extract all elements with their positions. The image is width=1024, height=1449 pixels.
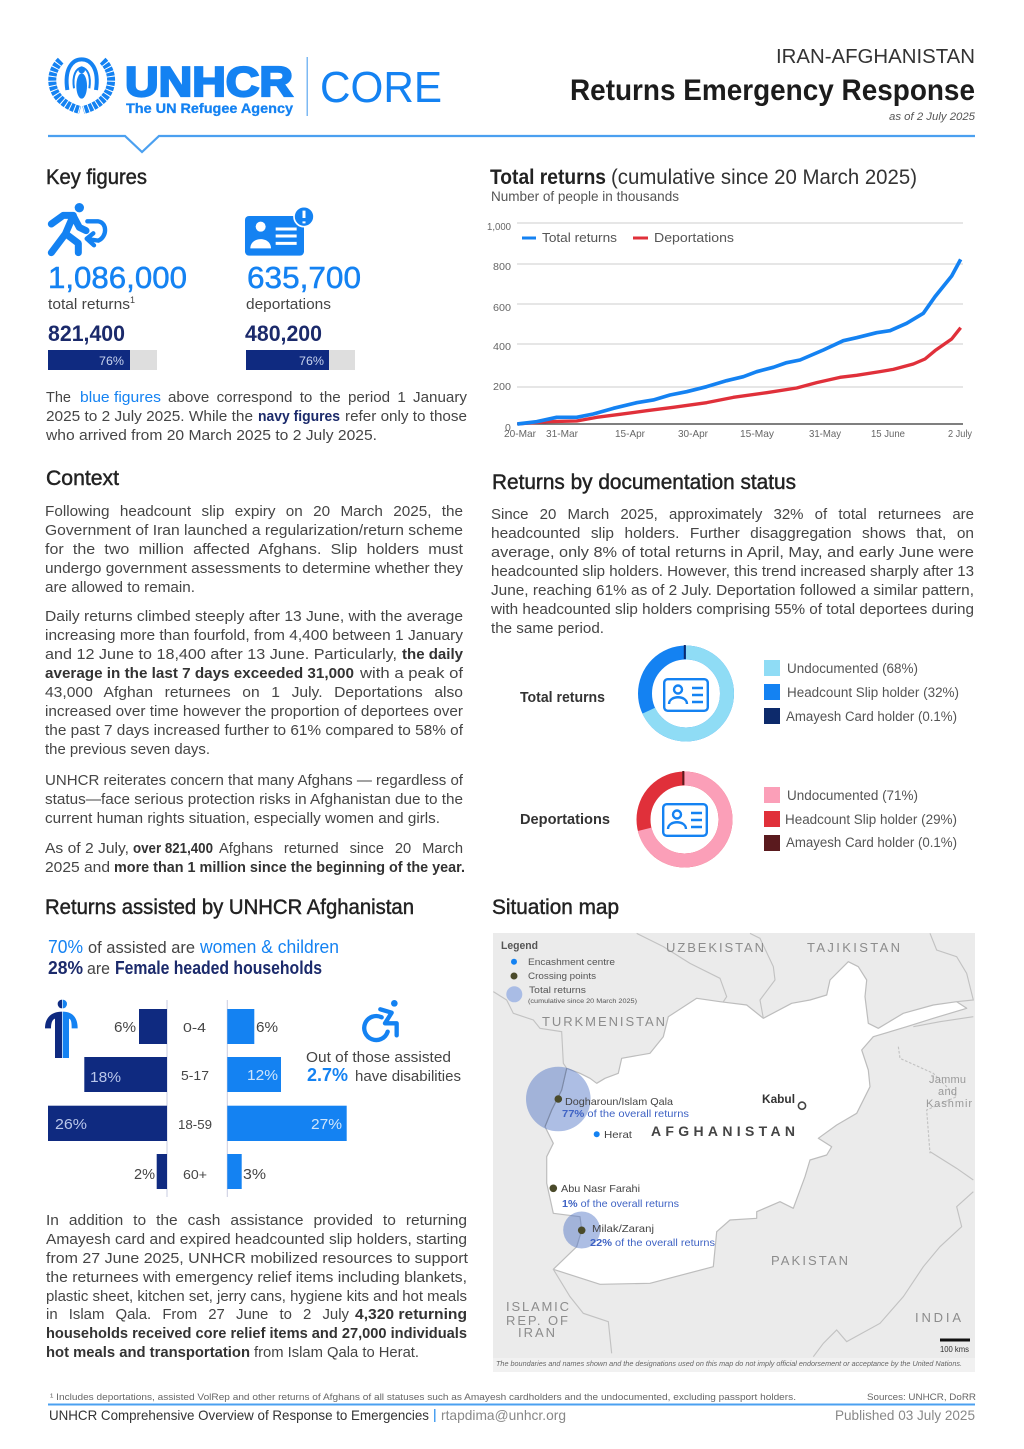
text: protection concern paragraph (45, 772, 464, 827)
text: daily returns paragraph: increasing more than fourfold, from 4,400 between 1 January (45, 627, 464, 644)
map: legend: Legend (501, 940, 538, 952)
chart gridlines and axis: 600 (493, 302, 511, 314)
text: disabilities callout: have disabilities (355, 1069, 461, 1085)
bar chart: female side: 26% (55, 1116, 87, 1133)
text: documentation paragraph: with headcounted slip holders comprising 55% of total deportees during (490, 601, 974, 618)
text: daily returns paragraph: increased over time however the proportion of deportees over (45, 703, 463, 720)
map: country labels: Jammu (929, 1074, 966, 1086)
map: country labels: INDIA (915, 1310, 961, 1325)
header: report title: IRAN-AFGHANISTAN (776, 46, 975, 68)
legend: deportations: Undocumented (71%) (787, 788, 918, 803)
panel: situation map (492, 896, 975, 1372)
text: figures explanation: blue figures (80, 389, 161, 406)
text: scheme paragraph: undergo government assessments to determine whether they (45, 560, 464, 577)
text: documentation paragraph: average, only 8% of total returns in April, May, and early June were (491, 544, 974, 561)
header: UNHCR CORE logo: CORE (320, 63, 442, 112)
map: crossing point Dogharoun (554, 1095, 689, 1120)
map: legend: Total returns (529, 985, 587, 995)
icon: person half navy half blue (45, 1000, 78, 1058)
panel: key figures (45, 166, 468, 444)
chart gridlines and axis: 15 June (871, 428, 905, 440)
figure: deportations: deportations (246, 296, 331, 313)
bar chart: male side (227, 1009, 347, 1189)
footnote: ¹ Includes deportations, assisted VolRep and other returns of Afghans of all statuses such as Amayesh cardholders and the undocumented, excluding passport holders. (50, 1392, 796, 1403)
header: report title (570, 46, 976, 123)
text: figures explanation: who arrived from 20 March 2025 to 2 July 2025. (45, 427, 377, 444)
text: totals paragraph (45, 840, 465, 876)
chart gridlines and axis: 15-May (740, 428, 775, 440)
heading: documentation status: Returns by documentation status (492, 471, 796, 494)
sources: Sources: UNHCR, DoRR (867, 1392, 976, 1403)
heading: total returns: Number of people in thousands (491, 188, 679, 204)
map: country labels: ISLAMIC (506, 1299, 569, 1314)
text: figures explanation: 2025 to 2 July 2025. While the (46, 408, 253, 425)
chart gridlines and axis: 2 July (948, 428, 973, 440)
progress bar: returns 76% (48, 350, 157, 370)
bar chart: male side: 12% (247, 1067, 278, 1084)
map: country labels: TAJIKISTAN (807, 940, 900, 955)
icon: person returning (51, 203, 105, 253)
text: daily returns paragraph: Daily returns climbed steeply after 13 June, with the average (45, 608, 463, 625)
text: scheme paragraph: are allowed to remain. (45, 579, 195, 596)
text: totals paragraph: 2025 and (45, 859, 110, 876)
header: UNHCR CORE logo: UNHCR (125, 58, 293, 105)
text: documentation paragraph: headcounted slip holders. However, this trend increased sharply after 13 (491, 563, 974, 580)
footer (48, 1392, 976, 1423)
chart legend: Deportations (654, 230, 735, 245)
bar chart: age labels (178, 1020, 212, 1182)
text: protection concern paragraph: status—face serious protection risks in Afghanistan due to the (45, 791, 463, 808)
heading: key figures: Key figures (46, 166, 147, 189)
text: documentation paragraph: the same period. (491, 620, 604, 637)
donut: total returns by status (645, 645, 727, 734)
map: legend: Encashment centre (528, 957, 615, 967)
panel: context (45, 467, 465, 876)
text: assistance paragraph: Amayesh card and expired headcounted slip holders, starting (46, 1231, 467, 1248)
publication date: Published 03 July 2025 (835, 1407, 975, 1423)
text: scheme paragraph: Government of Iran launched a regularization/return scheme (45, 522, 463, 539)
map: crossing point Milak (578, 1223, 715, 1249)
progress bar: deportations 76%: 76% (299, 354, 324, 368)
text: assistance paragraph: hot meals and transportation (46, 1344, 250, 1361)
text: figures explanation: refer only to those (345, 408, 467, 425)
header: report title: as of 2 July 2025 (889, 111, 976, 123)
text: assisted highlights: Female headed households (115, 958, 322, 978)
footer separator (434, 1409, 436, 1422)
text: documentation paragraph: June, reaching 61% as of 2 July. Deportation followed a similar pattern, (491, 582, 974, 599)
text: assistance paragraph: households received core relief items and 27,000 individuals (46, 1325, 467, 1342)
map: country labels: and (938, 1086, 957, 1098)
chart gridlines and axis: 200 (493, 381, 511, 393)
label: deportations donut: Deportations (520, 811, 610, 828)
map: Herat (594, 1129, 632, 1141)
text: disabilities callout: 2.7% (307, 1065, 348, 1085)
chart gridlines and axis: 31-Mar (546, 428, 578, 440)
line: deportations (517, 328, 961, 424)
bar chart: female side: 6% (114, 1019, 136, 1036)
map: country labels: AFGHANISTAN (651, 1123, 795, 1139)
map: country labels: UZBEKISTAN (666, 940, 764, 955)
map: crossing point Abu Nasr Farahi (550, 1183, 679, 1210)
map: legend (501, 940, 637, 1005)
chart gridlines and axis: 20-Mar (504, 428, 536, 440)
text: daily returns paragraph: the past 7 days increased further to 61% compared to 58% of (45, 722, 464, 739)
map: crossing point Milak: 22% of the overall returns (590, 1237, 715, 1249)
chart legend (522, 230, 735, 245)
map: Afghanistan shape (545, 962, 967, 1284)
text: daily returns paragraph (45, 608, 464, 758)
bar chart: male side: 27% (311, 1116, 342, 1133)
heading: total returns (490, 166, 917, 204)
figure: deportations: 635,700 (247, 260, 361, 295)
text: figures explanation (45, 389, 468, 444)
progress bar: returns 76%: 76% (99, 354, 124, 368)
map: legend: (cumulative since 20 March 2025) (528, 999, 637, 1005)
footer credit: UNHCR Comprehensive Overview of Response to Emergencies (49, 1407, 429, 1423)
text: scheme paragraph: Following headcount slip expiry on 20 March 2025, the (45, 503, 463, 520)
text: assisted highlights: women & children (199, 937, 339, 957)
map: country labels (506, 940, 972, 1340)
map: neighbouring borders (493, 933, 973, 1357)
text: totals paragraph: Afghans returned since 20 March (219, 840, 463, 857)
text: scheme paragraph (45, 503, 464, 596)
text: disabilities callout: Out of those assisted (306, 1050, 451, 1066)
bar chart: female side: 2% (134, 1166, 155, 1183)
text: assistance paragraph: from Islam Qala to Herat. (254, 1344, 419, 1361)
text: figures explanation: navy figures (258, 408, 340, 425)
text: totals paragraph: over 821,400 (133, 840, 213, 857)
map: crossing point Milak: Milak/Zaranj (592, 1223, 654, 1235)
bar chart: age labels: 18-59 (178, 1117, 212, 1132)
line: total returns (517, 259, 961, 424)
text: daily returns paragraph: 43,000 Afghan returnees on 1 July. Deportations also (45, 684, 463, 701)
text: assisted highlights: 28% (48, 958, 83, 978)
heading: situation map: Situation map (492, 896, 619, 919)
chart legend: Total returns (542, 230, 618, 245)
bar chart: male side: 3% (243, 1166, 266, 1183)
text: daily returns paragraph: average in the last 7 days exceeded 31,000 (45, 665, 354, 682)
chart gridlines and axis: 15-Apr (615, 428, 645, 440)
text: totals paragraph: As of 2 July, (45, 840, 129, 857)
chart gridlines and axis: 31-May (809, 428, 842, 440)
chart axes (167, 1000, 227, 1197)
bar chart: female side (48, 1009, 167, 1189)
figure: total returns: 1,086,000 (48, 260, 187, 295)
map: scale bar (940, 1338, 970, 1354)
legend: total returns (764, 660, 959, 724)
bar chart: male side: 6% (256, 1019, 278, 1036)
icon: ID card with alert (245, 207, 314, 256)
header: UNHCR CORE logo (52, 57, 442, 116)
figure: total returns: 1 (130, 295, 135, 305)
legend: total returns: Undocumented (68%) (787, 661, 918, 676)
figure: total returns: 821,400 (48, 321, 125, 346)
panel: returns assisted by UNHCR Afghanistan (45, 896, 469, 1361)
text: daily returns paragraph: the daily (402, 646, 464, 663)
header: report title: Returns Emergency Response (570, 74, 975, 107)
text: daily returns paragraph: with a peak of (359, 665, 464, 682)
icon: ID card (664, 679, 708, 711)
map: country labels: REP. OF (506, 1313, 568, 1328)
text: assistance paragraph: from 27 June 2025, UNHCR mobilized resources to support (46, 1250, 469, 1267)
map: legend: Crossing points (528, 971, 597, 981)
map background (493, 933, 975, 1372)
heading: total returns: Total returns (490, 166, 606, 189)
text: documentation paragraph: Since 20 March 2025, approximately 32% of total returnees are (491, 506, 974, 523)
text: assistance paragraph: 4,320 returning (355, 1306, 467, 1323)
bar chart: female side: 18% (90, 1069, 121, 1086)
map: crossing point Dogharoun: 77% of the overall returns (562, 1108, 689, 1120)
progress bar: deportations 76% (246, 350, 355, 370)
text: documentation paragraph: headcounted slip holders. Further disaggregation shows that, on (491, 525, 974, 542)
legend: deportations (764, 787, 957, 851)
donut: deportations by status (644, 771, 726, 860)
map: Herat: Herat (604, 1129, 632, 1141)
map: country labels: PAKISTAN (771, 1253, 848, 1268)
text: assistance paragraph: In addition to the cash assistance provided to returning (46, 1212, 467, 1229)
text: daily returns paragraph: the previous seven days. (45, 741, 210, 758)
text: figures explanation: above correspond to the period 1 January (168, 389, 468, 406)
heading: returns assisted: Returns assisted by UNHCR Afghanistan (45, 896, 414, 919)
text: assisted highlights (48, 937, 339, 978)
text: assistance paragraph (46, 1212, 469, 1361)
bar chart: age labels: 60+ (183, 1167, 207, 1182)
text: figures explanation: The (46, 389, 71, 406)
text: assisted highlights: 70% (48, 937, 83, 957)
icon: UNHCR wreath emblem (52, 59, 111, 110)
legend: deportations: Amayesh Card holder (0.1%) (786, 835, 957, 850)
map: country labels: IRAN (518, 1325, 555, 1340)
figure: deportations (245, 260, 361, 346)
heading: context: Context (46, 467, 119, 490)
text: scheme paragraph: for the two million affected Afghans. Slip holders must (45, 541, 464, 558)
chart gridlines and axis: 30-Apr (678, 428, 708, 440)
map: return volume circles (526, 1067, 600, 1248)
map: crossing point Abu Nasr Farahi: 1% of the overall returns (562, 1198, 679, 1210)
text: daily returns paragraph: and 12 June to 18,400 after 13 June. Particularly, (45, 646, 397, 663)
figure: total returns (48, 260, 187, 346)
figure: deportations: 480,200 (245, 321, 322, 346)
text: protection concern paragraph: current human rights situation, especially women and girls. (45, 810, 440, 827)
icon: wheelchair (364, 1000, 398, 1040)
map: crossing point Abu Nasr Farahi: Abu Nasr Farahi (561, 1183, 640, 1195)
map: country labels: TURKMENISTAN (542, 1014, 665, 1029)
map: disclaimer strip (493, 1358, 975, 1372)
map: disclaimer strip: The boundaries and names shown and the designations used on this map do not imply official endorsement or acceptance by the United Nations. (496, 1361, 962, 1368)
footer rule (48, 1404, 975, 1406)
chart gridlines and axis: 400 (493, 341, 511, 353)
text: assistance paragraph: the returnees with emergency relief items including blankets, (46, 1269, 467, 1286)
text: documentation paragraph (490, 506, 974, 637)
panel: returns by documentation status (490, 471, 974, 860)
figure: total returns: total returns (48, 296, 130, 313)
chart gridlines and axis (487, 221, 973, 440)
text: assistance paragraph: plastic sheet, kitchen set, jerry cans, hygiene kits and hot meals (46, 1288, 467, 1305)
header: UNHCR CORE logo: The UN Refugee Agency (126, 100, 293, 116)
chart gridlines and axis: 1,000 (487, 221, 511, 233)
map: Kabul (762, 1092, 806, 1109)
heading: total returns: (cumulative since 20 March 2025) (611, 166, 917, 189)
footer contact: rtapdima@unhcr.org (441, 1407, 566, 1423)
label: total returns donut: Total returns (520, 689, 605, 706)
text: totals paragraph: more than 1 million since the beginning of the year. (114, 859, 465, 876)
map: scale bar: 100 kms (940, 1345, 969, 1354)
panel: total returns line chart (487, 166, 973, 440)
text: assistance paragraph: in Islam Qala. From 27 June to 2 July (46, 1306, 349, 1323)
map: Kabul: Kabul (762, 1092, 795, 1106)
chart gridlines and axis: 0 (505, 422, 511, 434)
bar chart: age labels: 5-17 (181, 1068, 209, 1083)
header rule with chevron (48, 136, 975, 152)
legend: total returns: Headcount Slip holder (32%) (787, 685, 959, 700)
text: disabilities callout (306, 1050, 461, 1085)
map: crossing point Dogharoun: Dogharoun/Islam Qala (565, 1096, 673, 1108)
legend: total returns: Amayesh Card holder (0.1%) (786, 709, 957, 724)
legend: deportations: Headcount Slip holder (29%) (785, 812, 957, 827)
icon: ID card (663, 804, 707, 836)
bar chart: age labels: 0-4 (183, 1020, 206, 1035)
chart gridlines and axis: 800 (493, 261, 511, 273)
map: country labels: Kashmir (926, 1098, 972, 1110)
text: protection concern paragraph: UNHCR reiterates concern that many Afghans — regardless of (45, 772, 464, 789)
text: assisted highlights: are (87, 959, 110, 978)
text: assisted highlights: of assisted are (88, 938, 195, 957)
